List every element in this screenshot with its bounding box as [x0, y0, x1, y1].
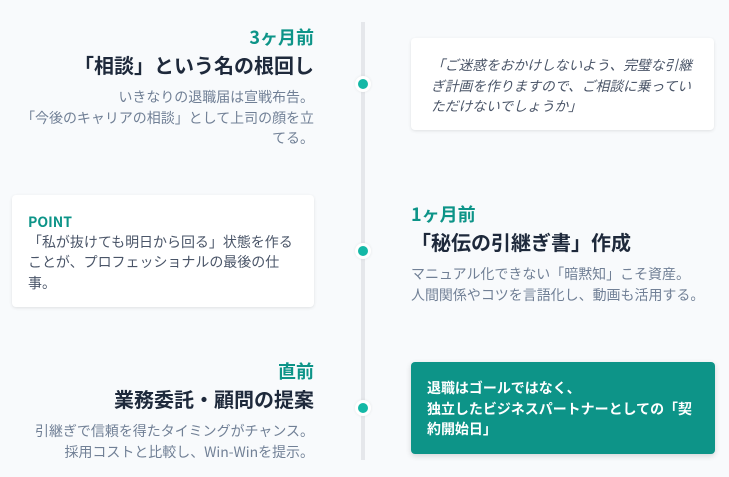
step 1 heading: 「相談」という名の根回し — [74, 50, 314, 79]
closing message text — [427, 378, 692, 439]
point text — [28, 232, 293, 292]
closing message text: 退職はゴールではなく、 — [427, 378, 581, 398]
quote card — [411, 38, 714, 130]
point text: 事。 — [28, 272, 56, 292]
step 3 body: 引継ぎで信頼を得たタイミングがチャンス。 — [35, 421, 314, 441]
step 3 body: 採用コストと比較し、Win-Winを提示。 — [64, 442, 314, 462]
timeline dot 2 — [355, 243, 371, 259]
step 2 label: 1ヶ月前 — [411, 201, 476, 227]
step 3 body — [35, 421, 314, 462]
step 1 body: いきなりの退職届は宣戦布告。 — [118, 87, 314, 107]
step 2 text block — [411, 201, 704, 304]
quote text — [431, 54, 694, 115]
step 3 heading: 業務委託・顧問の提案 — [114, 384, 314, 413]
closing message text: 約開始日」 — [427, 419, 497, 439]
point text: 「私が抜けても明日から回る」状態を作る — [28, 232, 293, 252]
step 2 body: 人間関係やコツを言語化し、動画も活用する。 — [411, 284, 704, 304]
closing message card — [411, 362, 715, 454]
timeline dot 1 — [355, 76, 371, 92]
timeline line — [361, 22, 365, 460]
quote text: 「ご迷惑をおかけしないよう、完璧な引継 — [431, 54, 692, 74]
step 1 label: 3ヶ月前 — [249, 24, 314, 50]
step 2 heading: 「秘伝の引継ぎ書」作成 — [411, 227, 631, 256]
step 1 body: てる。 — [272, 128, 314, 148]
point card — [12, 195, 314, 307]
quote text: ただけないでしょうか」 — [431, 95, 582, 115]
step 2 body — [411, 264, 704, 304]
step 3 text block — [35, 358, 314, 462]
step 1 text block — [21, 24, 314, 148]
closing message text: 独立したビジネスパートナーとしての「契 — [427, 398, 692, 418]
timeline dot 3 — [355, 400, 371, 416]
step 3 label: 直前 — [278, 358, 314, 384]
step 1 body: 「今後のキャリアの相談」として上司の顔を立 — [21, 108, 314, 128]
point text: ことが、プロフェッショナルの最後の仕 — [28, 252, 279, 272]
point label: POINT — [28, 212, 72, 232]
step 1 body — [21, 87, 314, 148]
step 2 body: マニュアル化できない「暗黙知」こそ資産。 — [411, 264, 690, 284]
quote text: ぎ計画を作りますので、ご相談に乗ってい — [431, 74, 691, 94]
